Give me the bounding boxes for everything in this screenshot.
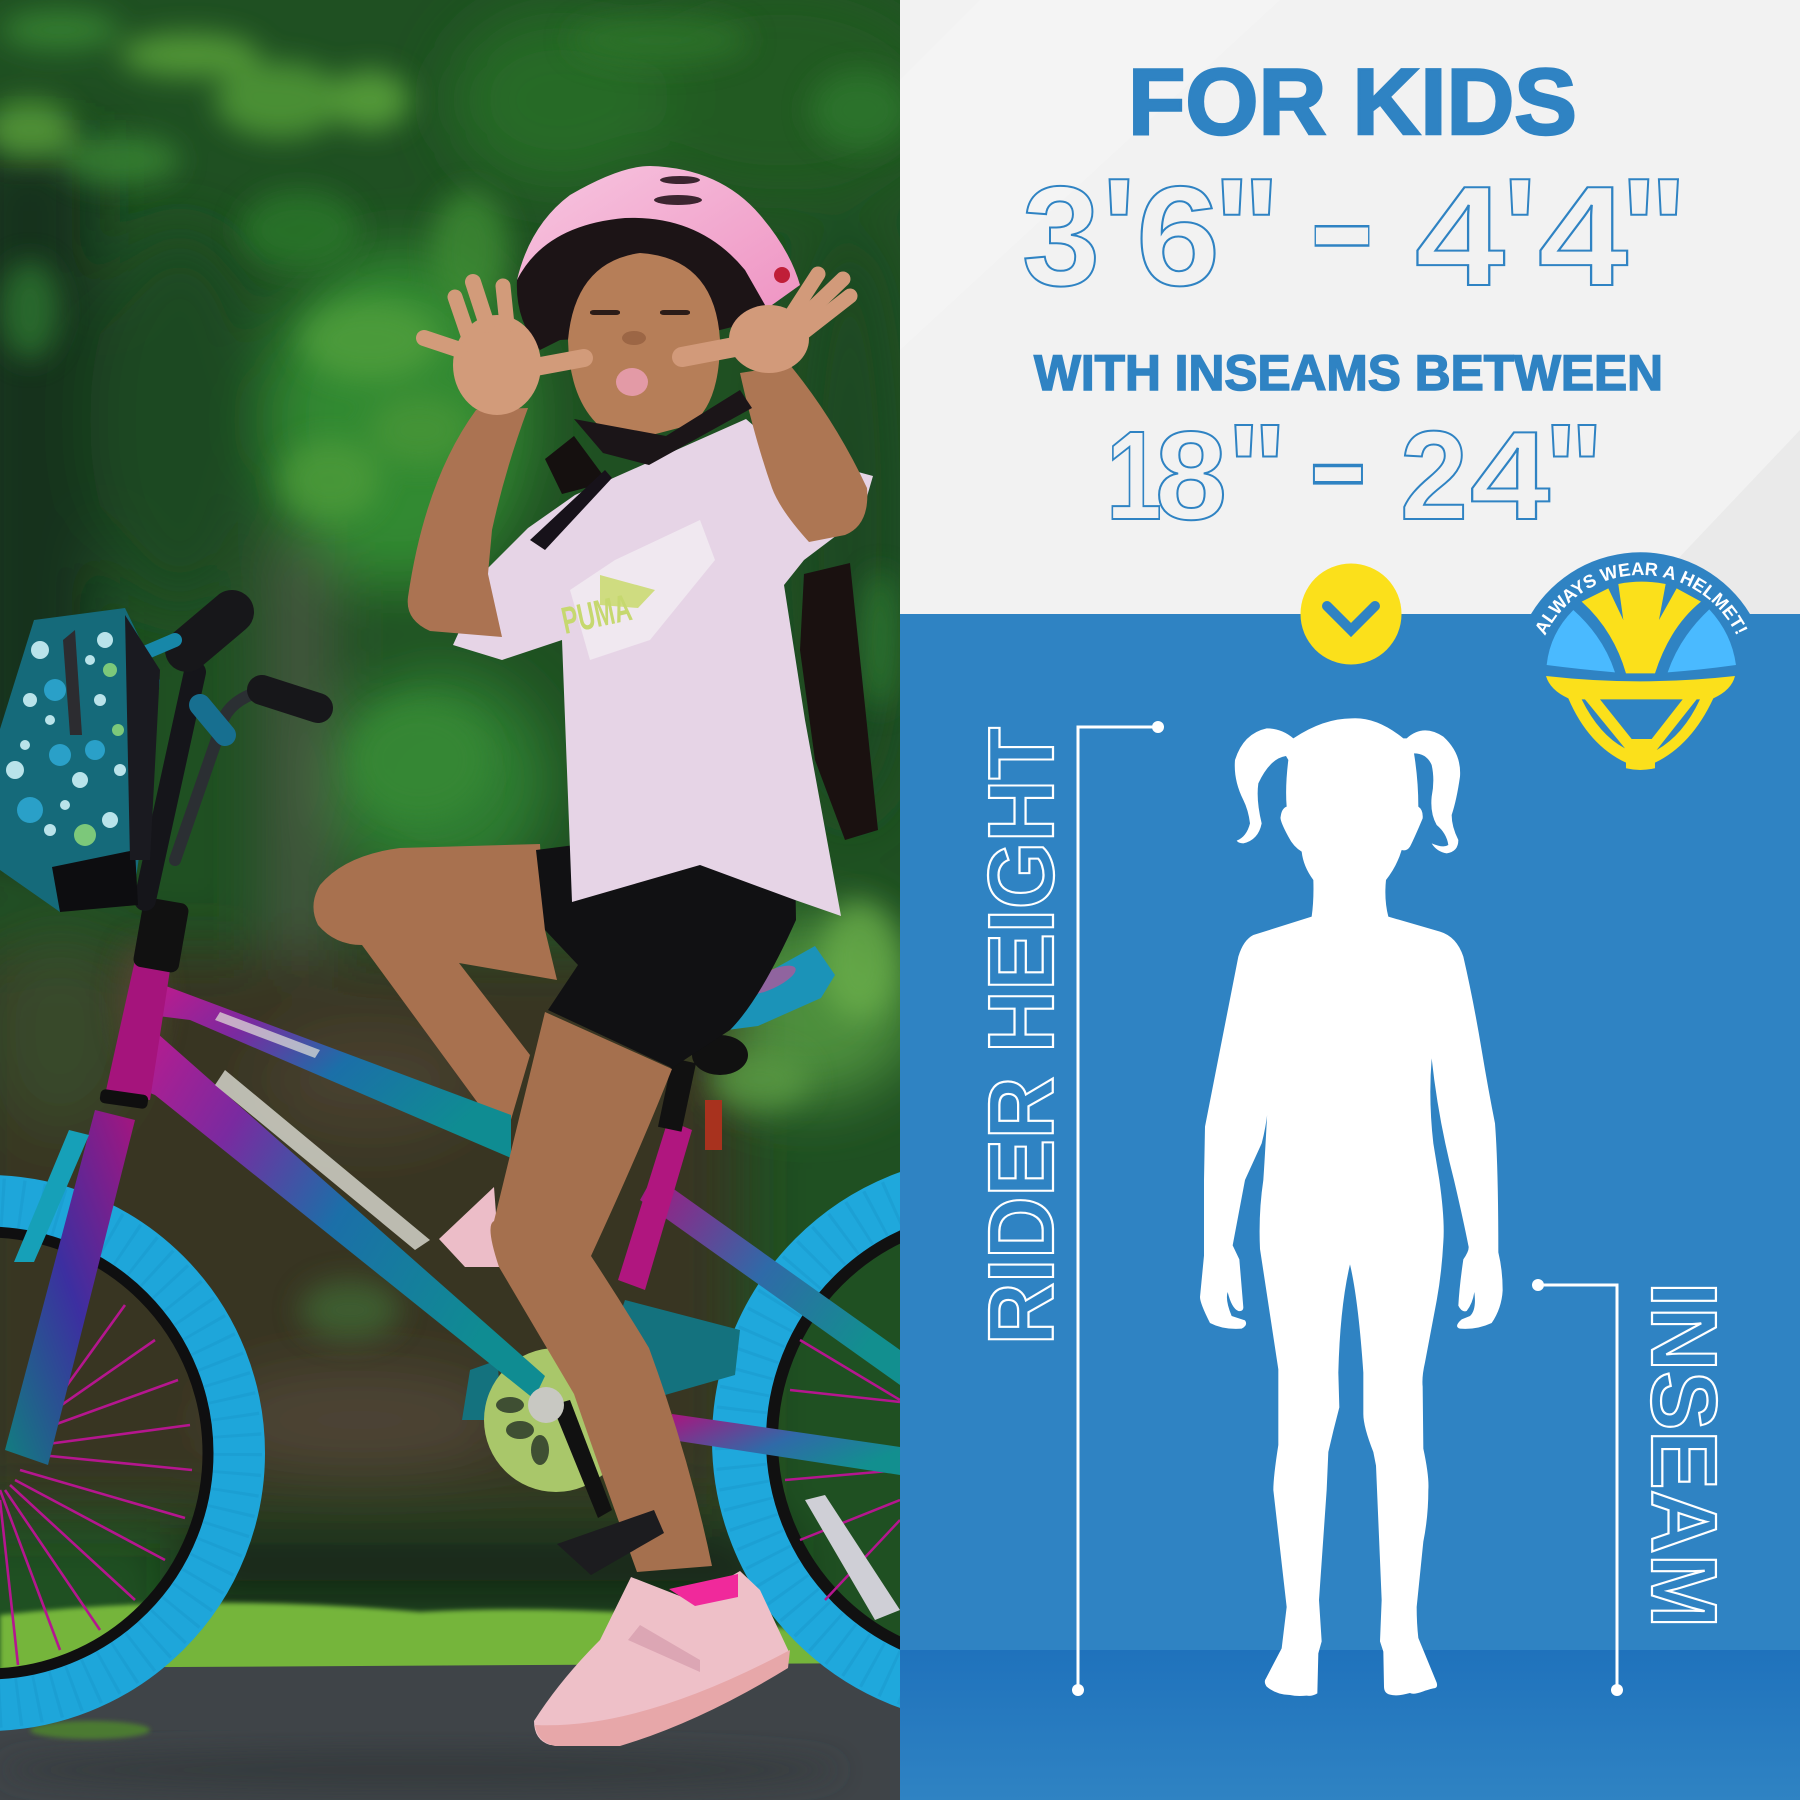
outlined text: inseam range — [1106, 363, 1604, 558]
rider height bracket — [1072, 721, 1164, 1696]
helmet drawing — [1546, 582, 1736, 770]
inseam label: INSEAM — [1632, 1282, 1736, 1628]
girl: hair behind — [545, 436, 878, 840]
outlined text: rider height range — [1022, 114, 1687, 330]
outlined text: rider height range: 3 — [1022, 157, 1100, 316]
girl: shorts — [536, 845, 796, 1068]
crank and pedal — [528, 1387, 664, 1575]
back raised leg and rear shoe — [313, 844, 557, 1267]
outlined text: inseam range: 4 — [1470, 405, 1550, 546]
outlined text: inseam range: " — [1227, 398, 1287, 539]
outlined text: rider height range: ' — [1102, 149, 1136, 308]
subheading: with inseams between: WITH INSEAMS BETWEEN — [1034, 345, 1663, 401]
forest background — [0, 0, 950, 1800]
bike: rear wheel — [740, 1183, 1254, 1697]
girl: right hand — [682, 274, 850, 373]
outlined text: rider height range: 6 — [1136, 157, 1220, 316]
photo: girl on bicycle — [0, 0, 1254, 1800]
outlined text: inseam range: 1 — [1106, 405, 1162, 546]
outlined text: rider height range: 4 — [1538, 157, 1628, 316]
road — [0, 1663, 900, 1800]
icon: always wear a helmet badge — [1531, 552, 1750, 770]
rider height label: RIDER HEIGHT — [969, 727, 1073, 1345]
girl: left hand — [424, 282, 584, 415]
grass strip — [0, 1603, 840, 1672]
bike: front wheel — [0, 1202, 238, 1704]
icon: child silhouette — [1200, 718, 1503, 1696]
bicycle saddle — [658, 946, 835, 1150]
shoe — [534, 1571, 790, 1746]
t-shirt logo — [558, 520, 715, 660]
outlined text: rider height range: " — [1620, 149, 1687, 308]
girl: face and neck — [530, 253, 752, 550]
sequin backpack — [0, 608, 160, 912]
outlined text: inseam range: – — [1311, 363, 1365, 558]
heading: for kids: FOR KIDS — [1128, 49, 1577, 154]
girl: left arm — [408, 408, 528, 637]
panel: blue measurement background — [900, 614, 1800, 1800]
girl: helmet — [517, 166, 800, 350]
bike frame — [5, 897, 900, 1465]
inseam bracket — [1532, 1279, 1623, 1696]
outlined text: rider height range: – — [1312, 114, 1372, 330]
outlined text: inseam range: " — [1544, 398, 1604, 539]
handlebar — [128, 612, 318, 900]
outlined text: inseam range: 2 — [1400, 405, 1468, 546]
badge text: ALWAYS WEAR A HELMET! — [1536, 562, 1748, 636]
t-shirt logo: PUMA — [558, 587, 635, 643]
girl: t-shirt — [453, 419, 873, 916]
outlined text: rider height range: 4 — [1415, 157, 1505, 316]
icon: yellow down chevron — [1300, 564, 1402, 664]
outlined text: inseam range: 8 — [1155, 405, 1227, 546]
panel: top info background — [900, 0, 1800, 620]
chainring and chain guard — [462, 1300, 900, 1492]
girl: front leg — [490, 1012, 712, 1572]
girl: right arm — [740, 365, 867, 542]
outlined text: rider height range: " — [1213, 149, 1280, 308]
outlined text: rider height range: ' — [1503, 149, 1537, 308]
